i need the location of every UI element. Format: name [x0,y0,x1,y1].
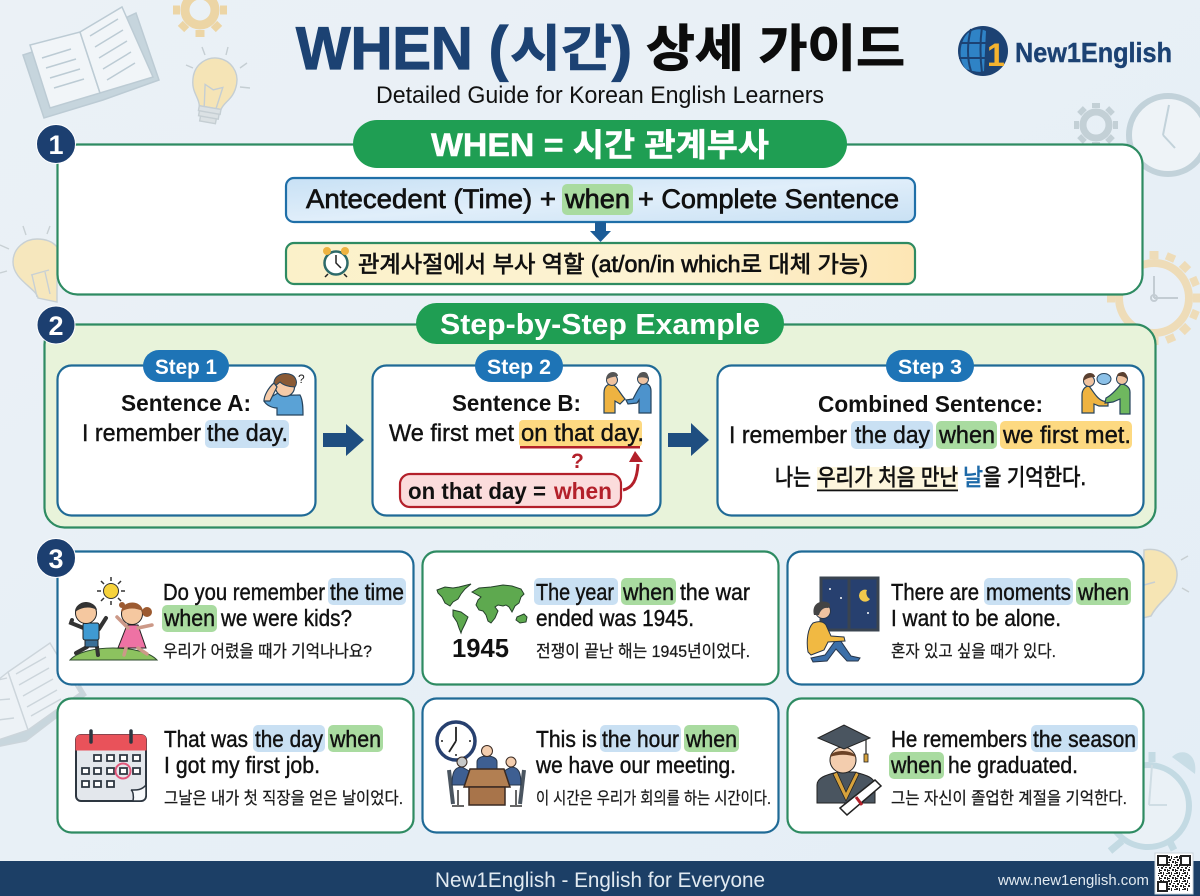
card: step 3: 날 [963,464,983,490]
card: step 2 [372,350,660,516]
logo: New1English [958,26,1172,76]
panel: example card 3 [788,552,1144,684]
heading pill: WHEN = 시간 관계부사 [353,120,847,168]
icon: person at night window [807,578,878,662]
number badge 3: 3 [48,544,64,574]
decorative icon: light bulb left [0,226,57,302]
number badge 1 [36,124,76,164]
title: 시간 [510,21,612,77]
formula box [286,178,915,222]
card: step 1: the day. [207,420,288,447]
card: step 3: I remember [729,422,847,449]
arrow: step 2 to 3 [668,423,709,456]
footer bar [0,861,1200,896]
panel: example card 5: when [685,726,737,752]
panel: example card 4 [58,698,414,832]
panel: example card 5: This is [536,726,597,752]
decorative icon: light bulb right lower [1143,549,1189,618]
panel: example card 2: when [622,579,674,605]
icon: graduate [817,725,881,815]
panel: example card 4: when [329,726,381,752]
panel: example card 5: the hour [602,726,679,752]
callout: on that day = when: on that day = [408,478,546,504]
formula box: + Complete Sentence [638,184,899,214]
panel: example card 3: I want to be alone. [891,605,1061,631]
note box [286,243,915,284]
card: step 3: 을 기억한다. [983,464,1086,490]
QR code [1155,853,1193,894]
card: step 2: Step 2 [487,356,551,379]
decorative icon: gear right [1074,103,1118,147]
panel: example card 5: 이 시간은 우리가 회의를 하는 시간이다. [536,789,771,808]
icon: confused person [264,372,305,415]
callout: on that day = when: when [553,478,612,504]
card: step 1: I remember [82,420,201,447]
panel: example card 3: moments [986,579,1071,605]
formula box: Antecedent (Time) + [306,184,556,214]
card: step 3: Combined Sentence: [818,391,1043,417]
card: step 2: on that day. [521,420,644,447]
label: 1945: 1945 [452,633,509,663]
decorative icon: wall clock right [1129,96,1200,174]
icon: kids playing in sun [70,577,157,660]
panel: example card 1 [58,552,414,684]
panel: example card 1: the time [330,579,404,605]
logo: New1English: New1English [1015,37,1172,68]
panel: example card 6: he graduated. [948,752,1078,778]
number badge 3 [36,538,76,578]
card: step 2: Sentence B: [452,390,581,416]
panel: example card 6: He remembers [891,726,1027,752]
panel: example card 2: the war [680,579,750,605]
card: step 3: 우리가 처음 만난 [817,464,958,490]
number badge 2: 2 [48,311,64,341]
decorative icon: light bulb top [186,47,250,126]
footer bar: New1English - English for Everyone [435,869,765,892]
heading pill: Step-by-Step Example [416,303,784,344]
title: WHEN ( [296,15,508,82]
panel: example card 2 [422,552,778,684]
card: step 3: we first met. [1002,422,1131,449]
card: step 2: ? [571,450,584,473]
panel: example card 4: That was [164,726,248,752]
card: step 3: when [938,422,995,449]
card: step 3 [718,350,1144,516]
panel: example card 3: There are [891,579,979,605]
panel: example card 6: the season [1033,726,1136,752]
panel: example card 3: 혼자 있고 싶을 때가 있다. [891,642,1056,661]
panel: example card 2: The year [536,579,614,605]
panel: example card 2: 전쟁이 끝난 해는 1945년이었다. [536,642,750,661]
icon: two people talking [1082,372,1130,414]
panel: example card 6: when [890,752,942,778]
icon: calendar [76,731,146,801]
panel: section 2 step by step [44,303,1156,528]
panel: example card 6: 그는 자신이 졸업한 계절을 기억한다. [891,789,1127,808]
icon: two people shaking hands [604,372,651,413]
title [296,15,905,82]
title: ) [612,15,632,82]
card: step 1 [58,350,316,516]
panel: example card 5 [422,698,778,832]
panel: example card 4: 그날은 내가 첫 직장을 얻은 날이었다. [164,789,403,808]
card: step 3: Step 3 [898,356,962,379]
panel: example card 1: when [163,605,215,631]
callout: on that day = when [400,474,621,507]
panel: example card 4: I got my first job. [164,752,320,778]
icon: alarm clock [323,247,349,277]
heading pill: WHEN = 시간 관계부사: WHEN = 시간 관계부사 [431,127,769,163]
panel: example card 2: ended was 1945. [536,605,694,631]
panel: section 1 definition [58,120,1142,294]
icon: world map [437,584,527,633]
decorative icon: book left lower [0,643,86,747]
card: step 1: Step 1 [155,356,217,379]
decorative icon: gear top [173,0,227,37]
arrow: step 1 to 2 [323,424,364,456]
heading pill: Step-by-Step Example: Step-by-Step Example [440,309,760,341]
panel: example card 3: when [1077,579,1129,605]
logo: New1English: 1 [987,37,1005,73]
number badge 1: 1 [48,130,64,160]
card: step 3: the day [855,422,930,449]
icon: confused person: ? [298,372,305,386]
panel: example card 5: we have our meeting. [535,752,736,778]
formula box: when [564,184,630,214]
decorative icon: stopwatch bottom right [1107,752,1195,851]
decorative icon: gear with clock right middle [1107,251,1200,345]
decorative icon: open book top left [23,7,159,118]
card: step 2: We first met [389,420,514,447]
number badge 2 [37,306,75,344]
card: step 1: Sentence A: [121,390,251,416]
panel: example card 6 [788,698,1144,832]
card: step 3: 나는 [775,464,811,490]
panel: example card 1: we were kids? [220,605,352,631]
title: 상세 가이드 [646,21,905,77]
icon: meeting with clock [437,722,524,806]
arrow: down [590,222,611,242]
panel: example card 1: 우리가 어렸을 때가 기억나나요? [163,642,372,661]
footer bar: www.new1english.com [997,872,1149,889]
subtitle: Detailed Guide for Korean English Learners [376,82,824,109]
panel: example card 4: the day [255,726,323,752]
note box: 관계사절에서 부사 역할 (at/on/in which로 대체 가능) [358,251,868,277]
arrow: curved red [623,451,643,490]
panel: example card 1: Do you remember [163,579,325,605]
